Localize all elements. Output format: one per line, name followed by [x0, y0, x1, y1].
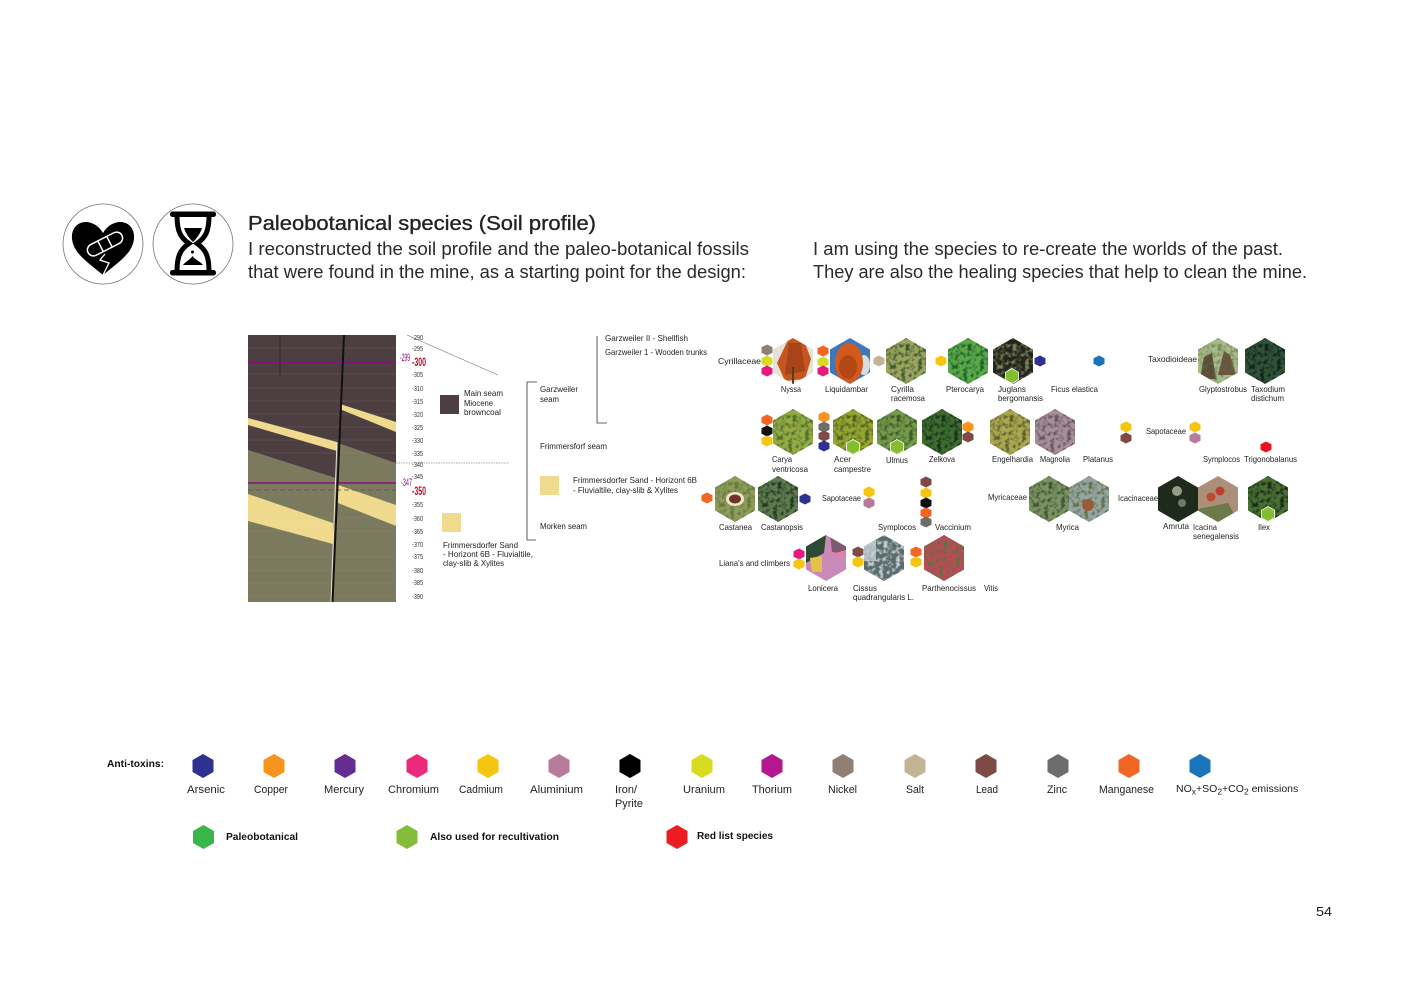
chart: depth scale: -345 — [412, 472, 423, 481]
panel: species row 1: bergomansis — [998, 393, 1043, 403]
bracket: seams: Garzweiler — [540, 384, 578, 394]
panel: species row 2: Platanus — [1083, 454, 1113, 464]
bracket: seams: seam — [540, 394, 559, 404]
panel: species row 3: Symplocos — [878, 522, 916, 532]
panel: species row 1: Ficus elastica — [1051, 384, 1098, 394]
panel: species row 3: Ilex — [1258, 522, 1271, 532]
panel: species row 3: Myrica — [1056, 522, 1079, 532]
panel: species row 1: racemosa — [891, 393, 925, 403]
legend: sand swatch lower: - Horizont 6B - Fluvialtile, — [443, 549, 533, 559]
legend: anti-toxins: Mercury — [324, 784, 364, 796]
chart: depth scale: -315 — [412, 397, 423, 406]
legend: sand swatch lower — [442, 513, 533, 568]
bracket: seams: Frimmersforf seam — [540, 441, 607, 451]
chart: depth scale: -310 — [412, 384, 423, 393]
chart: depth scale: -385 — [412, 578, 423, 587]
panel: species row 2: Carya — [772, 454, 792, 464]
legend: anti-toxins: Arsenic — [187, 784, 226, 796]
panel: species row 4: quadrangularis L. — [853, 592, 914, 602]
legend: anti-toxins: Thorium — [752, 784, 792, 796]
chart: depth scale: -380 — [412, 566, 423, 575]
legend: main seam swatch — [440, 388, 503, 417]
panel: species row 1: Taxodioideae — [1148, 354, 1197, 364]
text block: right intro: I am using the species to re-create the worlds of the past. — [813, 239, 1283, 259]
panel: species row 2 — [762, 409, 1297, 474]
chart: depth scale: -299 — [400, 352, 410, 364]
bracket: seams: Morken seam — [540, 521, 587, 531]
page number: 54 — [1316, 904, 1332, 919]
legend: anti-toxins: Cadmium — [459, 784, 503, 796]
panel: species row 2: Magnolia — [1040, 454, 1070, 464]
panel: species row 2: Zelkova — [929, 454, 955, 464]
panel: species row 2: Trigonobalanus — [1244, 454, 1297, 464]
bracket: seams — [527, 382, 697, 540]
legend: anti-toxins: NO — [1176, 783, 1192, 795]
legend: anti-toxins: Copper — [254, 784, 288, 796]
panel: species row 4: Parthenocissus — [922, 583, 976, 593]
chart: depth scale: -355 — [412, 500, 423, 509]
panel: species row 1: Liquidambar — [825, 384, 868, 394]
icon: hourglass — [153, 204, 233, 284]
legend: anti-toxins: Pyrite — [615, 798, 643, 810]
panel: species row 4: Lonicera — [808, 583, 838, 593]
chart: depth scale — [396, 333, 509, 601]
panel: species row 3: senegalensis — [1193, 531, 1239, 541]
panel: species row 3 — [702, 476, 1288, 541]
bracket: seams: - Fluvialtile, clay-slib & Xylites — [573, 485, 678, 495]
legend: anti-toxins: Iron/ — [615, 784, 638, 796]
panel: species row 2: Sapotaceae — [1146, 426, 1186, 436]
legend: anti-toxins: +CO — [1222, 783, 1244, 795]
legend: anti-toxins: 2 — [1244, 786, 1249, 796]
legend: species categories — [193, 825, 773, 849]
panel: species row 1: Taxodium — [1251, 384, 1285, 394]
chart: depth scale: -325 — [412, 423, 423, 432]
bracket: Garzweiler I and II: Garzweiler 1 - Wooden trunks — [605, 347, 707, 357]
legend: anti-toxins: Nickel — [828, 784, 857, 796]
legend: anti-toxins: x — [1192, 786, 1197, 796]
legend: main seam swatch: Miocene — [464, 398, 493, 408]
panel: species row 4: Liana's and climbers — [719, 558, 790, 568]
legend: anti-toxins: +SO — [1196, 783, 1217, 795]
chart: depth scale: -350 — [412, 484, 426, 498]
legend: anti-toxins — [107, 754, 1298, 810]
legend: anti-toxins: Zinc — [1047, 784, 1067, 796]
chart: depth scale: -375 — [412, 552, 423, 561]
legend: anti-toxins: Aluminium — [530, 784, 583, 796]
panel: species row 3: Vaccinium — [935, 522, 971, 532]
legend: main seam swatch: Main seam — [464, 388, 503, 398]
bracket: Garzweiler I and II — [597, 333, 707, 423]
title: Paleobotanical species (Soil profile) — [248, 212, 596, 235]
panel: species row 3: Castanopsis — [761, 522, 803, 532]
chart: depth scale: -300 — [412, 355, 426, 369]
panel: species row 2: ventricosa — [772, 464, 808, 474]
chart: depth scale: -365 — [412, 527, 423, 536]
chart: depth scale: -340 — [412, 460, 423, 469]
chart: depth scale: -320 — [412, 410, 423, 419]
panel: species row 3: Icacina — [1193, 522, 1217, 532]
panel: species row 1: Cyrilla — [891, 384, 914, 394]
panel: species row 2: campestre — [834, 464, 871, 474]
legend: species categories: Also used for recultivation — [430, 831, 559, 843]
legend: main seam swatch: browncoal — [464, 407, 501, 417]
panel: species row 4: Vitis — [984, 583, 998, 593]
panel: species row 1: Glyptostrobus — [1199, 384, 1247, 394]
legend: species categories: Red list species — [697, 830, 773, 842]
chart: depth scale: -390 — [412, 592, 423, 601]
panel: species row 4: Cissus — [853, 583, 877, 593]
panel: species row 2: Engelhardia — [992, 454, 1033, 464]
legend: sand swatch lower: clay-slib & Xylites — [443, 558, 504, 568]
panel: species row 1 — [718, 338, 1285, 403]
chart: depth scale: -290 — [412, 333, 423, 342]
legend: anti-toxins: Manganese — [1099, 784, 1154, 796]
panel: species row 3: Icacinaceae — [1118, 493, 1158, 503]
panel: species row 3: Amruta — [1163, 521, 1189, 531]
bracket: seams: Frimmersdorfer Sand - Horizont 6B — [573, 475, 697, 485]
chart: soil profile section — [248, 335, 396, 602]
panel: species row 1: distichum — [1251, 393, 1284, 403]
legend: anti-toxins: 2 — [1217, 786, 1222, 796]
panel: species row 3: Myricaceae — [988, 492, 1027, 502]
text block: left intro: that were found in the mine, as a starting point for the design: — [248, 262, 746, 282]
text block: left intro: I reconstructed the soil profile and the paleo-botanical fossils — [248, 239, 749, 259]
panel: species row 2: Acer — [834, 454, 851, 464]
chart: depth scale: -330 — [412, 436, 423, 445]
panel: species row 4 — [719, 535, 998, 602]
legend: anti-toxins: Chromium — [388, 784, 439, 796]
legend: anti-toxins: Lead — [976, 784, 998, 796]
legend: anti-toxins: Anti-toxins: — [107, 758, 164, 770]
panel: species row 1: Juglans — [998, 384, 1026, 394]
panel: species row 3: Sapotaceae — [822, 493, 861, 503]
panel: species row 2: Ulmus — [886, 455, 908, 465]
chart: depth scale: -305 — [412, 370, 423, 379]
legend: anti-toxins: Salt — [906, 784, 924, 796]
panel: species row 1: Pterocarya — [946, 384, 984, 394]
chart: depth scale: -335 — [412, 449, 423, 458]
chart: depth scale: -370 — [412, 540, 423, 549]
bracket: Garzweiler I and II: Garzweiler II - Shellfish — [605, 333, 688, 343]
legend: sand swatch lower: Frimmersdorfer Sand — [443, 540, 518, 550]
legend: species categories: Paleobotanical — [226, 831, 298, 843]
text block: right intro — [813, 239, 1307, 282]
legend: anti-toxins: Uranium — [683, 784, 725, 796]
panel: species row 1: Cyrillaceae — [718, 356, 761, 366]
text block: right intro: They are also the healing species that help to clean the mine. — [813, 262, 1307, 282]
panel: species row 3: Castanea — [719, 522, 752, 532]
text block: left intro — [248, 239, 749, 282]
panel: species row 1: Nyssa — [781, 384, 801, 394]
legend: anti-toxins: emissions — [1249, 783, 1298, 795]
icon: broken heart with bandage — [63, 204, 143, 284]
chart: depth scale: -347 — [401, 477, 412, 489]
panel: species row 2: Symplocos — [1203, 454, 1240, 464]
chart: depth scale: -295 — [412, 344, 423, 353]
chart: depth scale: -360 — [412, 514, 423, 523]
